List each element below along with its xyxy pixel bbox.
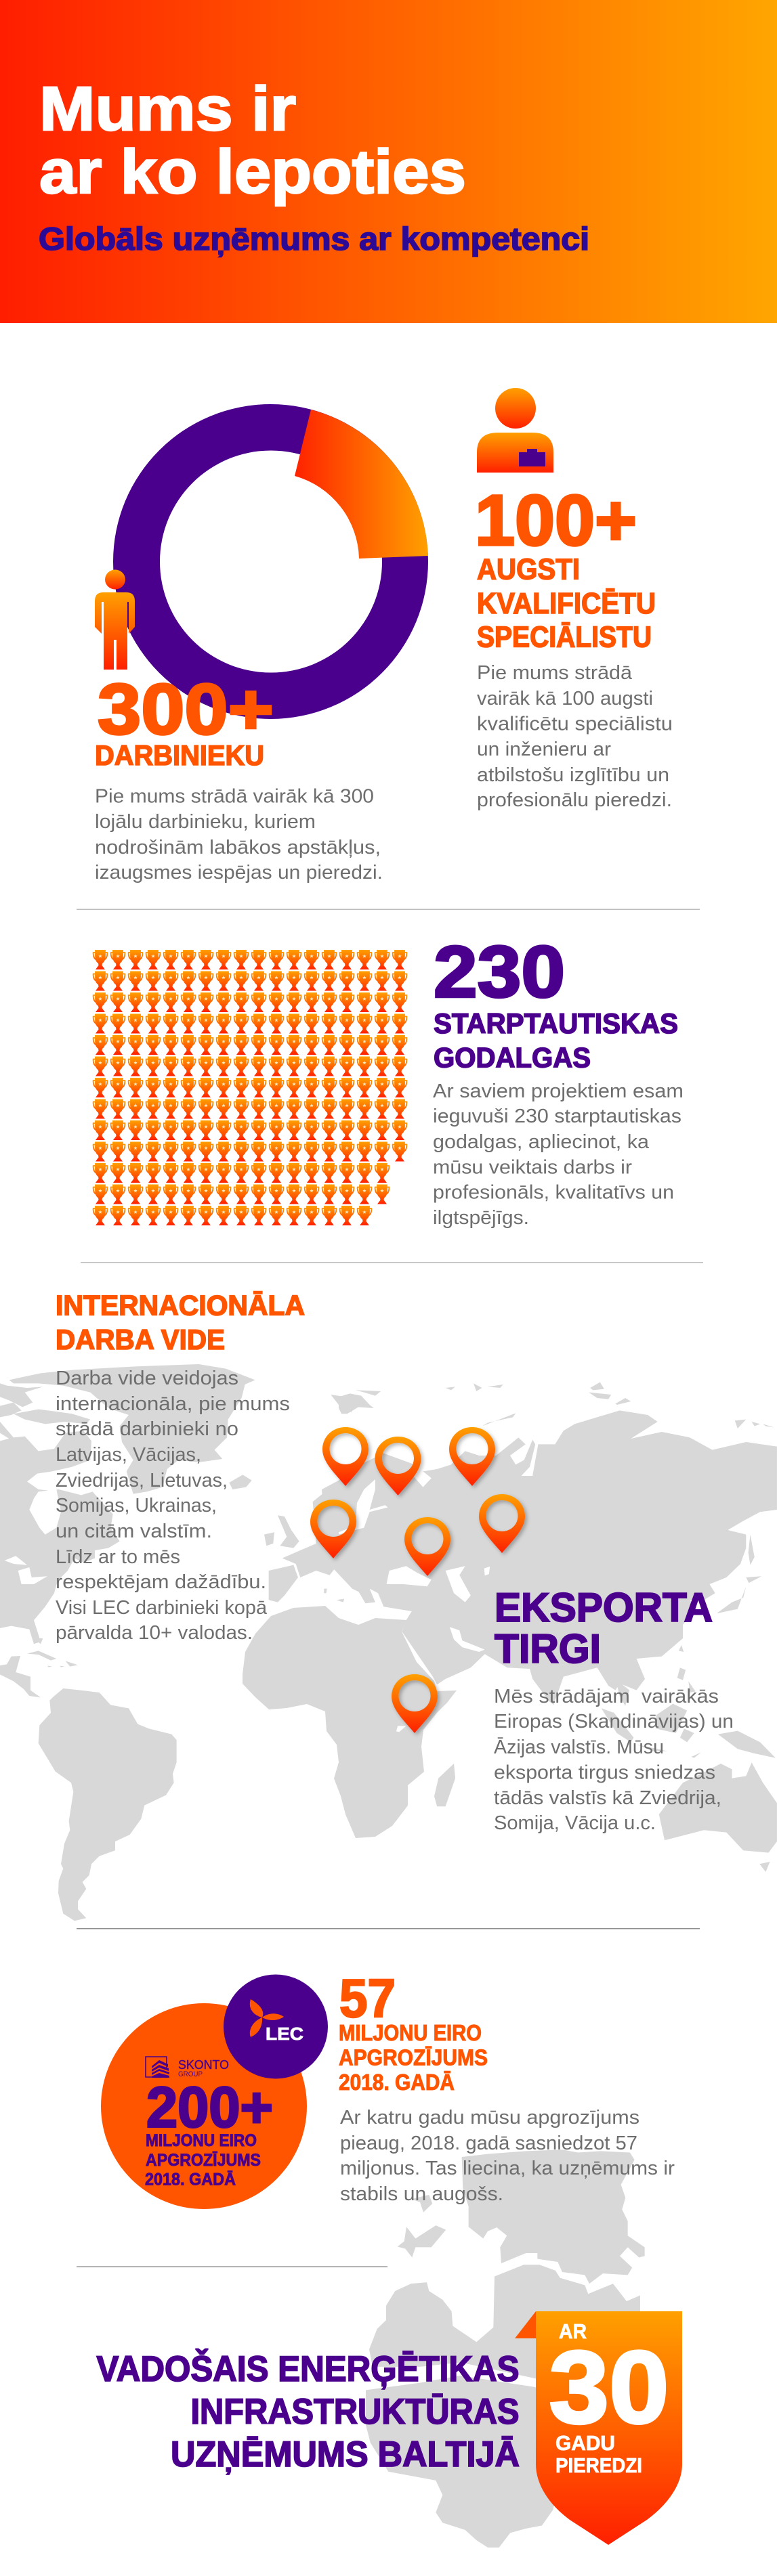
text: revenue description xyxy=(340,2107,675,2205)
text: employees description: lojālu darbinieku, kuriem xyxy=(95,811,316,833)
text: export markets: Āzijas valstīs. Mūsu xyxy=(494,1737,664,1758)
text: awards description: ieguvuši 230 starptautiskas xyxy=(433,1106,681,1127)
title: ar ko lepoties xyxy=(39,137,466,206)
text: employees description: nodrošinām labākos apstākļus, xyxy=(95,837,381,858)
region: Africa xyxy=(243,1606,457,1838)
text: revenue description: miljonus. Tas liecina, ka uzņēmums ir xyxy=(340,2158,675,2179)
text: awards description: Ar saviem projektiem esam xyxy=(433,1080,684,1102)
map pins xyxy=(310,1427,525,1733)
circle: LEC logo: LEC xyxy=(266,2024,303,2044)
stat: 100+ specialists: 100+ xyxy=(475,481,637,561)
closing heading: INFRASTRUKTŪRAS xyxy=(191,2392,519,2432)
text: specialists description xyxy=(477,662,673,811)
text: specialists description: profesionālu pieredzi. xyxy=(477,789,672,811)
logo: Skonto Group xyxy=(146,2057,229,2078)
text: international work environment: Visi LEC darbinieki kopā xyxy=(56,1597,268,1619)
stat: 57 million euro: MILJONU EIRO xyxy=(339,2020,482,2045)
text: awards description: profesionāls, kvalitatīvs un xyxy=(433,1182,674,1204)
revenue circles xyxy=(101,1974,328,2209)
icon: small person xyxy=(95,570,135,670)
text: employees description: Pie mums strādā vairāk kā 300 xyxy=(95,785,374,807)
text: specialists description: un inženieru ar xyxy=(477,739,611,760)
stat: 100+ specialists xyxy=(475,481,673,811)
heading: international work environment: DARBA VIDE xyxy=(56,1324,225,1355)
stat: 57 million euro: APGROZĪJUMS xyxy=(339,2045,488,2070)
text: export markets xyxy=(494,1686,734,1834)
text: employees description xyxy=(95,785,383,883)
circle: Skonto Group revenue: APGROZĪJUMS xyxy=(146,2151,261,2170)
stat: 100+ specialists: SPECIĀLISTU xyxy=(477,620,652,654)
circle: LEC logo xyxy=(224,1974,328,2078)
stat: 300+ employees: DARBINIEKU xyxy=(95,739,264,771)
circle: Skonto Group revenue: 2018. GADĀ xyxy=(145,2170,236,2189)
text: international work environment: Latvijas, Vācijas, xyxy=(56,1444,201,1466)
title: Mums ir xyxy=(39,74,296,144)
stat: 300+ employees: 300+ xyxy=(98,670,274,749)
icon grid: 230 trophies xyxy=(92,950,409,1227)
text: international work environment: pārvalda 10+ valodas. xyxy=(56,1622,253,1644)
map: Baltic states xyxy=(366,2149,645,2548)
text: international work environment: un citām valstīm. xyxy=(56,1521,212,1542)
logo: Skonto Group: SKONTO xyxy=(178,2058,229,2072)
badge: 30 years of experience: PIEREDZI xyxy=(555,2453,642,2477)
text: revenue description: pieaug, 2018. gadā sasniedzot 57 xyxy=(340,2133,637,2154)
stat: 300+ employees xyxy=(95,670,383,883)
text: revenue description: Ar katru gadu mūsu apgrozījums xyxy=(340,2107,639,2129)
stat: 230 awards: STARPTAUTISKAS xyxy=(434,1007,678,1039)
circle: Skonto Group revenue: 200+ xyxy=(146,2076,273,2139)
badge: 30 years of experience: 30 xyxy=(549,2330,669,2445)
heading: international work environment xyxy=(56,1289,305,1355)
text: international work environment: strādā darbinieki no xyxy=(56,1418,238,1440)
text: specialists description: kvalificētu speciālistu xyxy=(477,714,673,735)
text: export markets: Mēs strādājam vairākās xyxy=(494,1686,719,1707)
badge: 30 years of experience: AR xyxy=(559,2319,587,2343)
heading: export markets xyxy=(495,1585,713,1672)
text: export markets: Somija, Vācija u.c. xyxy=(494,1812,656,1834)
text: awards description: godalgas, apliecinot, ka xyxy=(433,1131,650,1153)
stat: 100+ specialists: KVALIFICĒTU xyxy=(477,587,656,620)
heading: export markets: EKSPORTA xyxy=(495,1585,713,1630)
closing heading: VADOŠAIS ENERĢĒTIKAS xyxy=(96,2348,519,2389)
text: awards description: mūsu veiktais darbs ir xyxy=(433,1156,632,1178)
text: export markets: Eiropas (Skandināvijas) un xyxy=(494,1711,734,1732)
stat: 57 million euro: 2018. GADĀ xyxy=(339,2070,455,2095)
text: specialists description: Pie mums strādā xyxy=(477,662,633,684)
text: international work environment: internacionāla, pie mums xyxy=(56,1393,290,1415)
icon: specialist with briefcase xyxy=(477,388,553,473)
stat: 230 awards xyxy=(433,930,684,1229)
world map xyxy=(0,1364,777,1921)
text: awards description xyxy=(433,1080,684,1229)
stat: 230 awards: 230 xyxy=(434,930,565,1013)
text: export markets: eksporta tirgus sniedzas xyxy=(494,1762,715,1783)
subtitle: Globāls uzņēmums ar kompetenci xyxy=(39,221,589,257)
stat: 230 awards: GODALGAS xyxy=(434,1041,591,1074)
badge: 30 years of experience: GADU xyxy=(555,2431,615,2455)
text: awards description: ilgtspējīgs. xyxy=(433,1207,529,1229)
closing heading xyxy=(96,2348,520,2474)
text: specialists description: vairāk kā 100 augsti xyxy=(477,688,653,710)
heading: international work environment: INTERNACIONĀLA xyxy=(56,1289,305,1322)
donut chart xyxy=(113,404,428,719)
stat: 100+ specialists: AUGSTI xyxy=(477,552,580,586)
text: international work environment: Darba vide veidojas xyxy=(56,1368,238,1389)
text: international work environment xyxy=(56,1368,290,1644)
text: international work environment: Līdz ar to mēs xyxy=(56,1546,180,1568)
stat: 57 million euro: 57 xyxy=(339,1968,396,2028)
badge: 30 years of experience xyxy=(515,2311,682,2545)
text: export markets: tādās valstīs kā Zviedrija, xyxy=(494,1787,721,1809)
circle: Skonto Group revenue: MILJONU EIRO xyxy=(146,2131,257,2150)
circle: Skonto Group revenue xyxy=(101,2003,307,2209)
text: specialists description: atbilstošu izglītību un xyxy=(477,764,669,786)
text: international work environment: respektējam dažādību. xyxy=(56,1571,266,1593)
heading: export markets: TIRGI xyxy=(495,1626,601,1672)
stat: 57 million euro xyxy=(339,1968,675,2205)
text: international work environment: Zviedrijas, Lietuvas, xyxy=(56,1470,228,1491)
title xyxy=(39,74,466,206)
text: employees description: izaugsmes iespējas un pieredzi. xyxy=(95,862,383,883)
closing heading: UZŅĒMUMS BALTIJĀ xyxy=(171,2435,520,2474)
text: revenue description: stabils un augošs. xyxy=(340,2183,503,2205)
header banner xyxy=(0,0,777,323)
logo: Skonto Group: GROUP xyxy=(178,2070,203,2078)
text: international work environment: Somijas, Ukrainas, xyxy=(56,1495,217,1516)
